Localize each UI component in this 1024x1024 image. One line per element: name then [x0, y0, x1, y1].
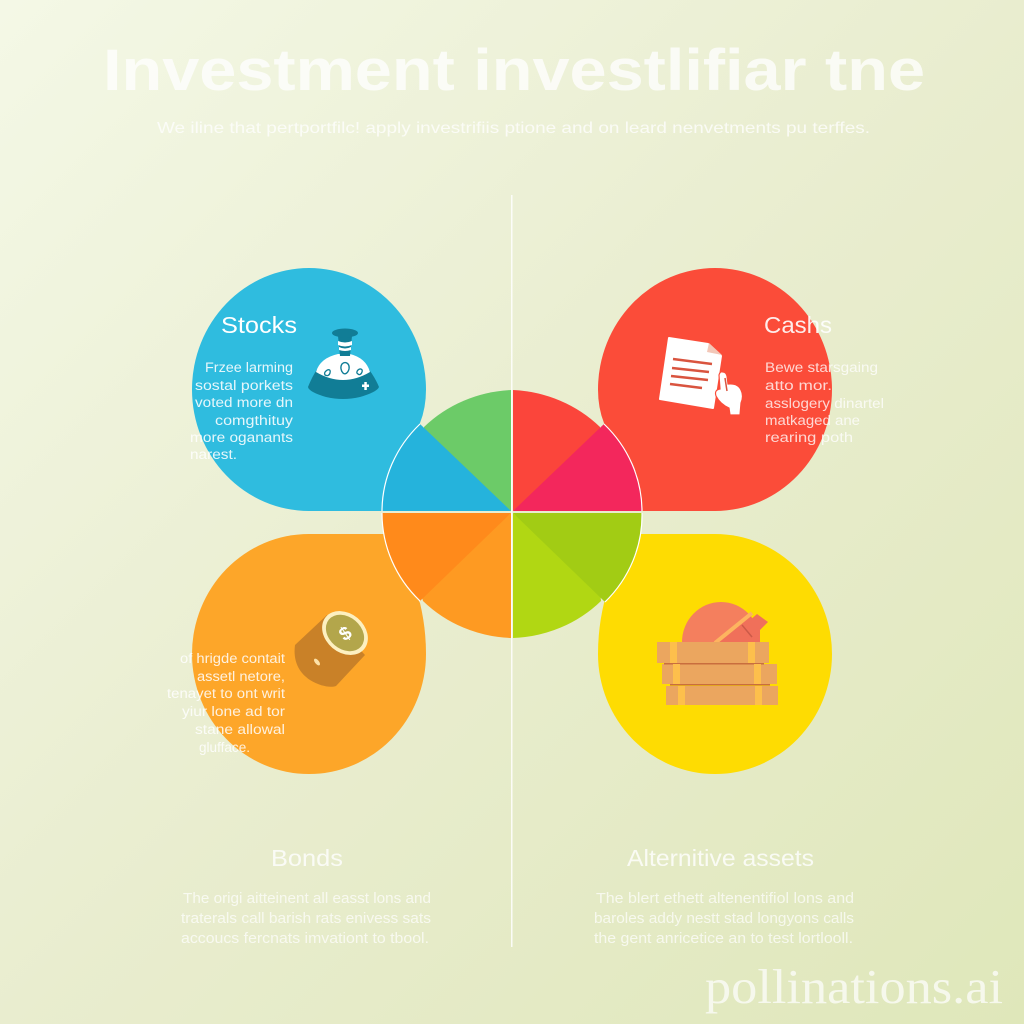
stocks text	[190, 360, 293, 462]
wedge: lime	[513, 513, 601, 638]
stocks text: sostal porkets	[195, 378, 293, 393]
alternative assets caption text: The blert ethett altenentifiol lons and	[596, 891, 854, 907]
alternative assets caption text: the gent anricetice an to test lortlooll.	[594, 931, 853, 947]
icon: coin	[295, 602, 377, 687]
panel: stocks	[190, 268, 426, 511]
cashs petal	[598, 268, 832, 511]
bonds caption heading: Bonds	[271, 845, 343, 871]
wedge: red	[513, 390, 600, 511]
bonds body text: glufface.	[199, 740, 250, 755]
panel: bonds	[167, 534, 426, 774]
bonds body text: of hrigde contait	[180, 651, 285, 666]
subtitle: We iline that pertportfilc! apply investrifiis ptione and on leard nenvetments pu terffes.	[157, 120, 870, 137]
bonds body text: assetl netore,	[197, 669, 285, 684]
watermark: pollinations.ai	[705, 959, 1003, 1014]
bonds body text	[167, 651, 286, 755]
pie wheel	[382, 390, 642, 638]
alternative assets petal	[598, 534, 832, 774]
bonds caption text	[181, 891, 431, 947]
cashs text: asslogery dinartel	[765, 396, 884, 411]
icon: crates	[657, 602, 778, 705]
bonds petal	[192, 534, 426, 774]
stocks text: narest.	[190, 447, 237, 462]
cashs text: Bewe starsgaing	[765, 360, 878, 375]
cashs text: atto mor.	[765, 378, 832, 393]
wedge: green	[424, 390, 511, 511]
wedge: orange	[420, 513, 511, 638]
alternative assets caption	[594, 845, 854, 947]
cashs heading: Cashs	[764, 312, 832, 338]
cashs text	[765, 360, 884, 445]
stocks heading: Stocks	[221, 312, 297, 338]
panel: cashs	[598, 268, 884, 511]
cashs text: matkaged ane	[765, 413, 860, 428]
alternative assets caption text: baroles addy nestt stad longyons calls	[594, 911, 854, 927]
icon: document with hand	[660, 338, 742, 415]
stocks petal	[192, 268, 426, 511]
alternative assets caption heading: Alternitive assets	[627, 845, 814, 871]
title: Investment investlifiar tne	[103, 38, 925, 103]
bonds body text: tenayet to ont writ	[167, 686, 285, 701]
panel: alternative assets	[598, 534, 832, 774]
stocks text: comgthituy	[215, 413, 293, 428]
bonds body text: yiur lone ad tor	[182, 704, 286, 719]
bonds caption text: The origi aitteinent all easst lons and	[183, 891, 431, 907]
alternative assets caption text	[594, 891, 854, 947]
wheel highlight arcs	[382, 424, 642, 602]
wedge: pink	[513, 424, 642, 511]
cashs text: rearing poth	[765, 430, 853, 445]
stocks text: Frzee larming	[205, 360, 293, 375]
wedge: blue	[382, 424, 511, 511]
wedge: olive green	[513, 513, 642, 602]
bonds caption text: traterals call barish rats enivess sats	[181, 911, 431, 927]
center divider line	[511, 195, 512, 947]
bonds caption	[181, 845, 431, 947]
stocks text: more oganants	[190, 430, 293, 445]
icon: flask	[308, 328, 379, 399]
stocks text: voted more dn	[195, 395, 293, 410]
icon: coin: $	[336, 622, 357, 646]
bonds caption text: accoucs fercnats imvationt to tbool.	[181, 931, 429, 947]
wedge: dark orange	[382, 513, 511, 601]
bonds body text: stane allowal	[195, 722, 285, 737]
